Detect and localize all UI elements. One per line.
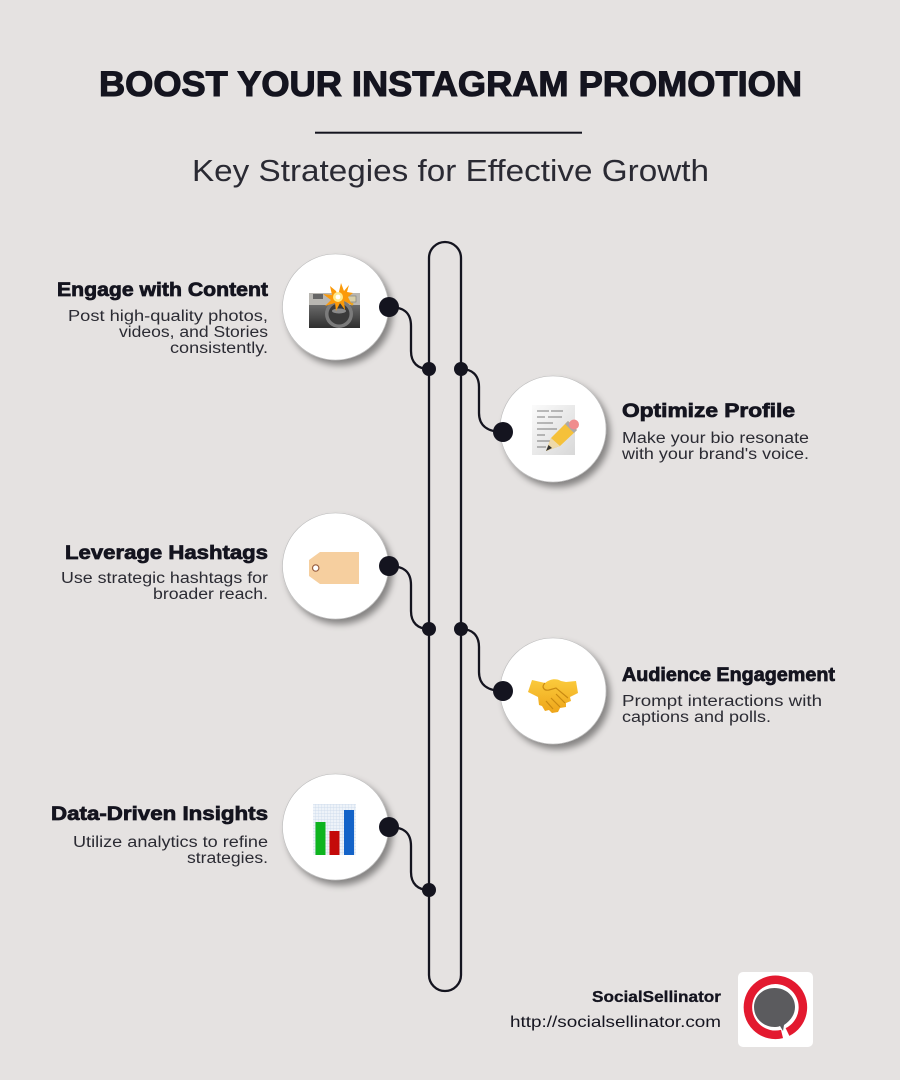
timeline node xyxy=(422,883,436,897)
connector xyxy=(389,566,429,629)
title: BOOST YOUR INSTAGRAM PROMOTION xyxy=(99,65,802,104)
text: engage description: consistently. xyxy=(170,340,268,357)
panel: data-driven insights xyxy=(51,774,436,897)
text: audience description: captions and polls. xyxy=(622,709,771,726)
connector xyxy=(461,629,503,691)
timeline node xyxy=(454,362,468,376)
text: optimize description: with your brand's voice. xyxy=(621,446,809,463)
icon: memo and pencil xyxy=(532,405,579,455)
circle badge xyxy=(500,376,606,482)
icon: camera with flash xyxy=(309,283,360,328)
heading: optimize profile: Optimize Profile xyxy=(622,400,795,422)
connector xyxy=(389,827,429,890)
heading: leverage hashtags: Leverage Hashtags xyxy=(65,542,268,564)
heading: audience engagement: Audience Engagement xyxy=(622,664,835,686)
connector dot xyxy=(379,297,399,317)
timeline node xyxy=(454,622,468,636)
text: engage description: videos, and Stories xyxy=(119,324,268,341)
text: engage description xyxy=(68,308,268,357)
text: optimize description xyxy=(621,430,809,463)
text: insights description: strategies. xyxy=(187,850,268,867)
subtitle: Key Strategies for Effective Growth xyxy=(192,154,709,188)
brand url: http://socialsellinator.com xyxy=(510,1014,721,1031)
connector dot xyxy=(493,422,513,442)
circle badge xyxy=(282,254,388,360)
connector xyxy=(389,307,429,369)
central timeline track xyxy=(429,242,461,991)
text: insights description xyxy=(73,834,268,867)
panel: leverage hashtags xyxy=(61,513,436,636)
text: audience description: Prompt interactions with xyxy=(622,693,822,710)
icon: bar chart xyxy=(313,804,356,855)
text: hashtags description: Use strategic hashtags for xyxy=(61,570,268,587)
brand name: SocialSellinator xyxy=(592,989,721,1006)
text: hashtags description: broader reach. xyxy=(153,586,268,603)
timeline node xyxy=(422,622,436,636)
icon: handshake xyxy=(528,679,578,713)
logo xyxy=(738,972,813,1047)
text: engage description: Post high-quality photos, xyxy=(68,308,268,325)
panel: audience engagement xyxy=(454,622,835,744)
connector dot xyxy=(379,556,399,576)
connector dot xyxy=(379,817,399,837)
text: insights description: Utilize analytics to refine xyxy=(73,834,268,851)
heading: data-driven insights: Data-Driven Insights xyxy=(51,803,268,825)
circle badge xyxy=(500,638,606,744)
icon: label tag xyxy=(309,552,359,584)
text: optimize description: Make your bio resonate xyxy=(622,430,809,447)
connector dot xyxy=(493,681,513,701)
panel: engage with content xyxy=(57,254,436,376)
circle badge xyxy=(282,513,388,619)
panel: optimize profile xyxy=(454,362,809,482)
circle badge xyxy=(282,774,388,880)
heading: engage with content: Engage with Content xyxy=(57,279,269,301)
text: hashtags description xyxy=(61,570,268,603)
text: audience description xyxy=(622,693,822,726)
connector xyxy=(461,369,503,432)
timeline node xyxy=(422,362,436,376)
